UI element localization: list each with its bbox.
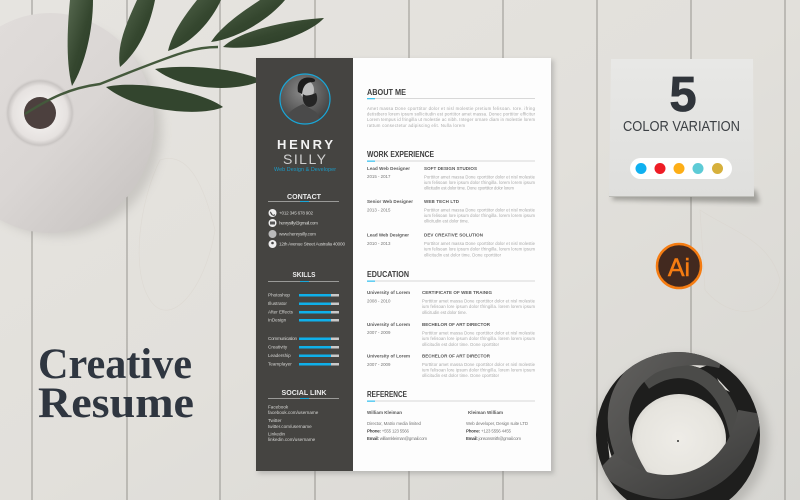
section: education: BECHELOR OF ART DIRECTOR: [422, 322, 491, 327]
sticky note: 5 color variation: [609, 59, 760, 203]
section: education: Porttitor amet massa Done cporttitor dolor et nisl molestie: [422, 298, 536, 304]
caption: COLOR VARIATION: [623, 118, 740, 135]
section: work experience: Porttitor amet massa Done cporttitor dolor et nisl molestie: [424, 208, 536, 212]
contact list: 12th Avenue Street Australia 40000: [279, 242, 345, 246]
section: work experience: ollicitudin est dolor time. Done cporttitor: [424, 252, 502, 258]
section: reference: Phone: +123 5556 4455: [466, 428, 512, 434]
section: work experience: Porttitor amet massa Done cporttitor dolor et nisl molestie: [424, 241, 536, 246]
section: education: CERTIFICATE OF WEB TRAINIG: [422, 290, 492, 295]
portrait photo: [280, 74, 330, 126]
social links: twitter.com/username: [268, 424, 312, 429]
skill bars: [268, 292, 339, 366]
section: education: Porttitor amet massa Done cporttitor dolor et nisl molestie: [422, 362, 536, 367]
heading: social link: [268, 388, 339, 399]
number 5: 5: [669, 68, 697, 122]
section: education: 2008 - 2010: [367, 298, 391, 304]
section: work experience: DEV CREATIVE SOLUTION: [424, 232, 483, 238]
skill bars: Creativity: [268, 344, 288, 350]
section: reference: Email: jonsonsmith@gmail.com: [466, 436, 521, 441]
section: about me: Amet massa Done cporttitor dolor et nisl molestie pretium felisoan. Iore. ifring: [367, 106, 536, 111]
skill bars: Illustrator: [268, 301, 287, 306]
section: about me: [367, 88, 536, 128]
name: HENRY: [277, 137, 333, 152]
contact list: +012 345 678 902: [279, 210, 313, 216]
social links: Twitter: [268, 418, 282, 423]
skill bars: Leadership: [268, 353, 291, 358]
section: education: ollicitudin est dolor time.: [422, 310, 467, 315]
section: work experience: WORK EXPERIENCE: [367, 150, 434, 159]
section: work experience: 2013 - 2015: [367, 208, 391, 212]
section: work experience: WEB TECH LTD: [424, 199, 460, 204]
section: education: [367, 270, 536, 378]
section: work experience: [367, 150, 536, 258]
heading: contact: CONTACT: [287, 192, 321, 201]
section: about me: Lorem tempus id fringilla ut molestie ac nibh. Integer ornare diam in molestie lorem: [367, 117, 536, 122]
heading: skills: SKILLS: [292, 270, 316, 279]
contact list: henrysilly@gmail.com: [279, 220, 318, 226]
section: work experience: ollicitudin est dolor time. Done cporttitor dolor lorem: [424, 186, 514, 190]
section: work experience: ollicitudin est dolor time.: [424, 218, 469, 224]
section: work experience: ium felisoan lore ipsum dolor tfringilla. lorem lorem ipsum: [424, 213, 536, 218]
section: education: 2007 - 2009: [367, 362, 391, 367]
section: reference: Director, Matrix media limited: [367, 421, 422, 426]
section: reference: Kleiman William: [468, 410, 503, 415]
name: [274, 137, 336, 173]
section: reference: Email: williamkleiman@gmail.com: [367, 436, 427, 441]
heading: social link: SOCIAL LINK: [282, 388, 327, 397]
section: work experience: Senior Web Designer: [367, 199, 413, 204]
title: Creative Resume: [38, 341, 194, 427]
candle in black rings: [596, 352, 768, 500]
skill bars: Photoshop: [268, 292, 290, 298]
heading: contact: [268, 192, 339, 202]
section: work experience: ium felisoan lore ipsum dolor tfringilla. lorem lorem ipsum: [424, 180, 536, 185]
section: work experience: ium felisoan lore ipsum dolor tfringilla. lorem lorem ipsum: [424, 246, 536, 252]
section: work experience: Porttitor amet massa Done cporttitor dolor et nisl molestie: [424, 174, 536, 180]
resume shadow: [258, 60, 554, 474]
heading: skills: [268, 270, 339, 282]
skill bars: Communication: [268, 336, 297, 341]
name: SILLY: [283, 151, 327, 167]
title: Creative Resume: Creative: [38, 341, 192, 388]
skill bars: InDesign: [268, 318, 287, 322]
section: reference: REFERENCE: [367, 390, 407, 399]
panel: resume sidebar: [256, 58, 353, 471]
icon: Adobe Illustrator: Ai: [668, 254, 690, 282]
section: work experience: 2010 - 2013: [367, 241, 391, 246]
section: education: University of Lorem: [367, 322, 410, 327]
white vase: [0, 13, 162, 236]
section: education: University of Lorem: [367, 290, 410, 295]
olive branch: [25, 0, 324, 114]
icon: Adobe Illustrator: [657, 244, 701, 288]
section: work experience: 2015 - 2017: [367, 174, 391, 179]
skill bars: Teamplayer: [268, 362, 292, 366]
contact list: www.henrysilly.com: [279, 232, 316, 236]
name: Web Design & Developer: [274, 167, 336, 173]
section: about me: rattum consectetur adipiscing elit. Nulla lorem: [367, 123, 466, 128]
section: about me: ABOUT ME: [367, 88, 406, 97]
section: reference: Phone: +555 123 5566: [367, 428, 410, 434]
skill bars: After Effects: [268, 310, 294, 314]
colour swatches: [630, 158, 732, 179]
section: education: 2007 - 2009: [367, 330, 391, 335]
section: education: EDUCATION: [367, 270, 409, 279]
section: education: ium felisoan lore ipsum dolor tfringilla. lorem lorem ipsum: [422, 304, 536, 309]
section: education: BECHELOR OF ART DIRECTOR: [422, 354, 491, 358]
section: reference: [367, 390, 535, 441]
section: reference: William Kleiman: [367, 410, 402, 415]
social links: Linkedin: [268, 432, 286, 436]
section: education: ollicitudin est dolor time. Done cporttitor: [422, 373, 500, 378]
section: education: University of Lorem: [367, 354, 410, 358]
section: education: ium felisoan lore ipsum dolor tfringilla. lorem lorem ipsum: [422, 368, 536, 372]
panel: resume main: [353, 58, 551, 471]
section: about me: detistbero lorem ipsum sollicitudin est porttitor amet massa. Donec porttitor efficitur: [367, 112, 536, 116]
section: education: ium felisoan lore ipsum dolor tfringilla. lorem lorem ipsum: [422, 336, 536, 341]
section: work experience: Lead Web Designer: [367, 232, 409, 238]
section: education: ollicitudin est dolor time. Done cporttitor: [422, 342, 500, 347]
section: work experience: Lead Web Designer: [367, 166, 410, 171]
social links: facebook.com/username: [268, 410, 319, 415]
section: reference: Web developer, Design suite LTD: [466, 421, 528, 426]
social links: Facebook: [268, 404, 289, 410]
social links: linkedin.com/username: [268, 437, 316, 442]
social links: [268, 404, 319, 442]
title: Creative Resume: Resume: [38, 380, 194, 427]
contact list: [268, 209, 345, 248]
section: work experience: SOFT DESIGN STUDIOS: [424, 166, 477, 171]
section: education: Porttitor amet massa Done cporttitor dolor et nisl molestie: [422, 330, 536, 336]
